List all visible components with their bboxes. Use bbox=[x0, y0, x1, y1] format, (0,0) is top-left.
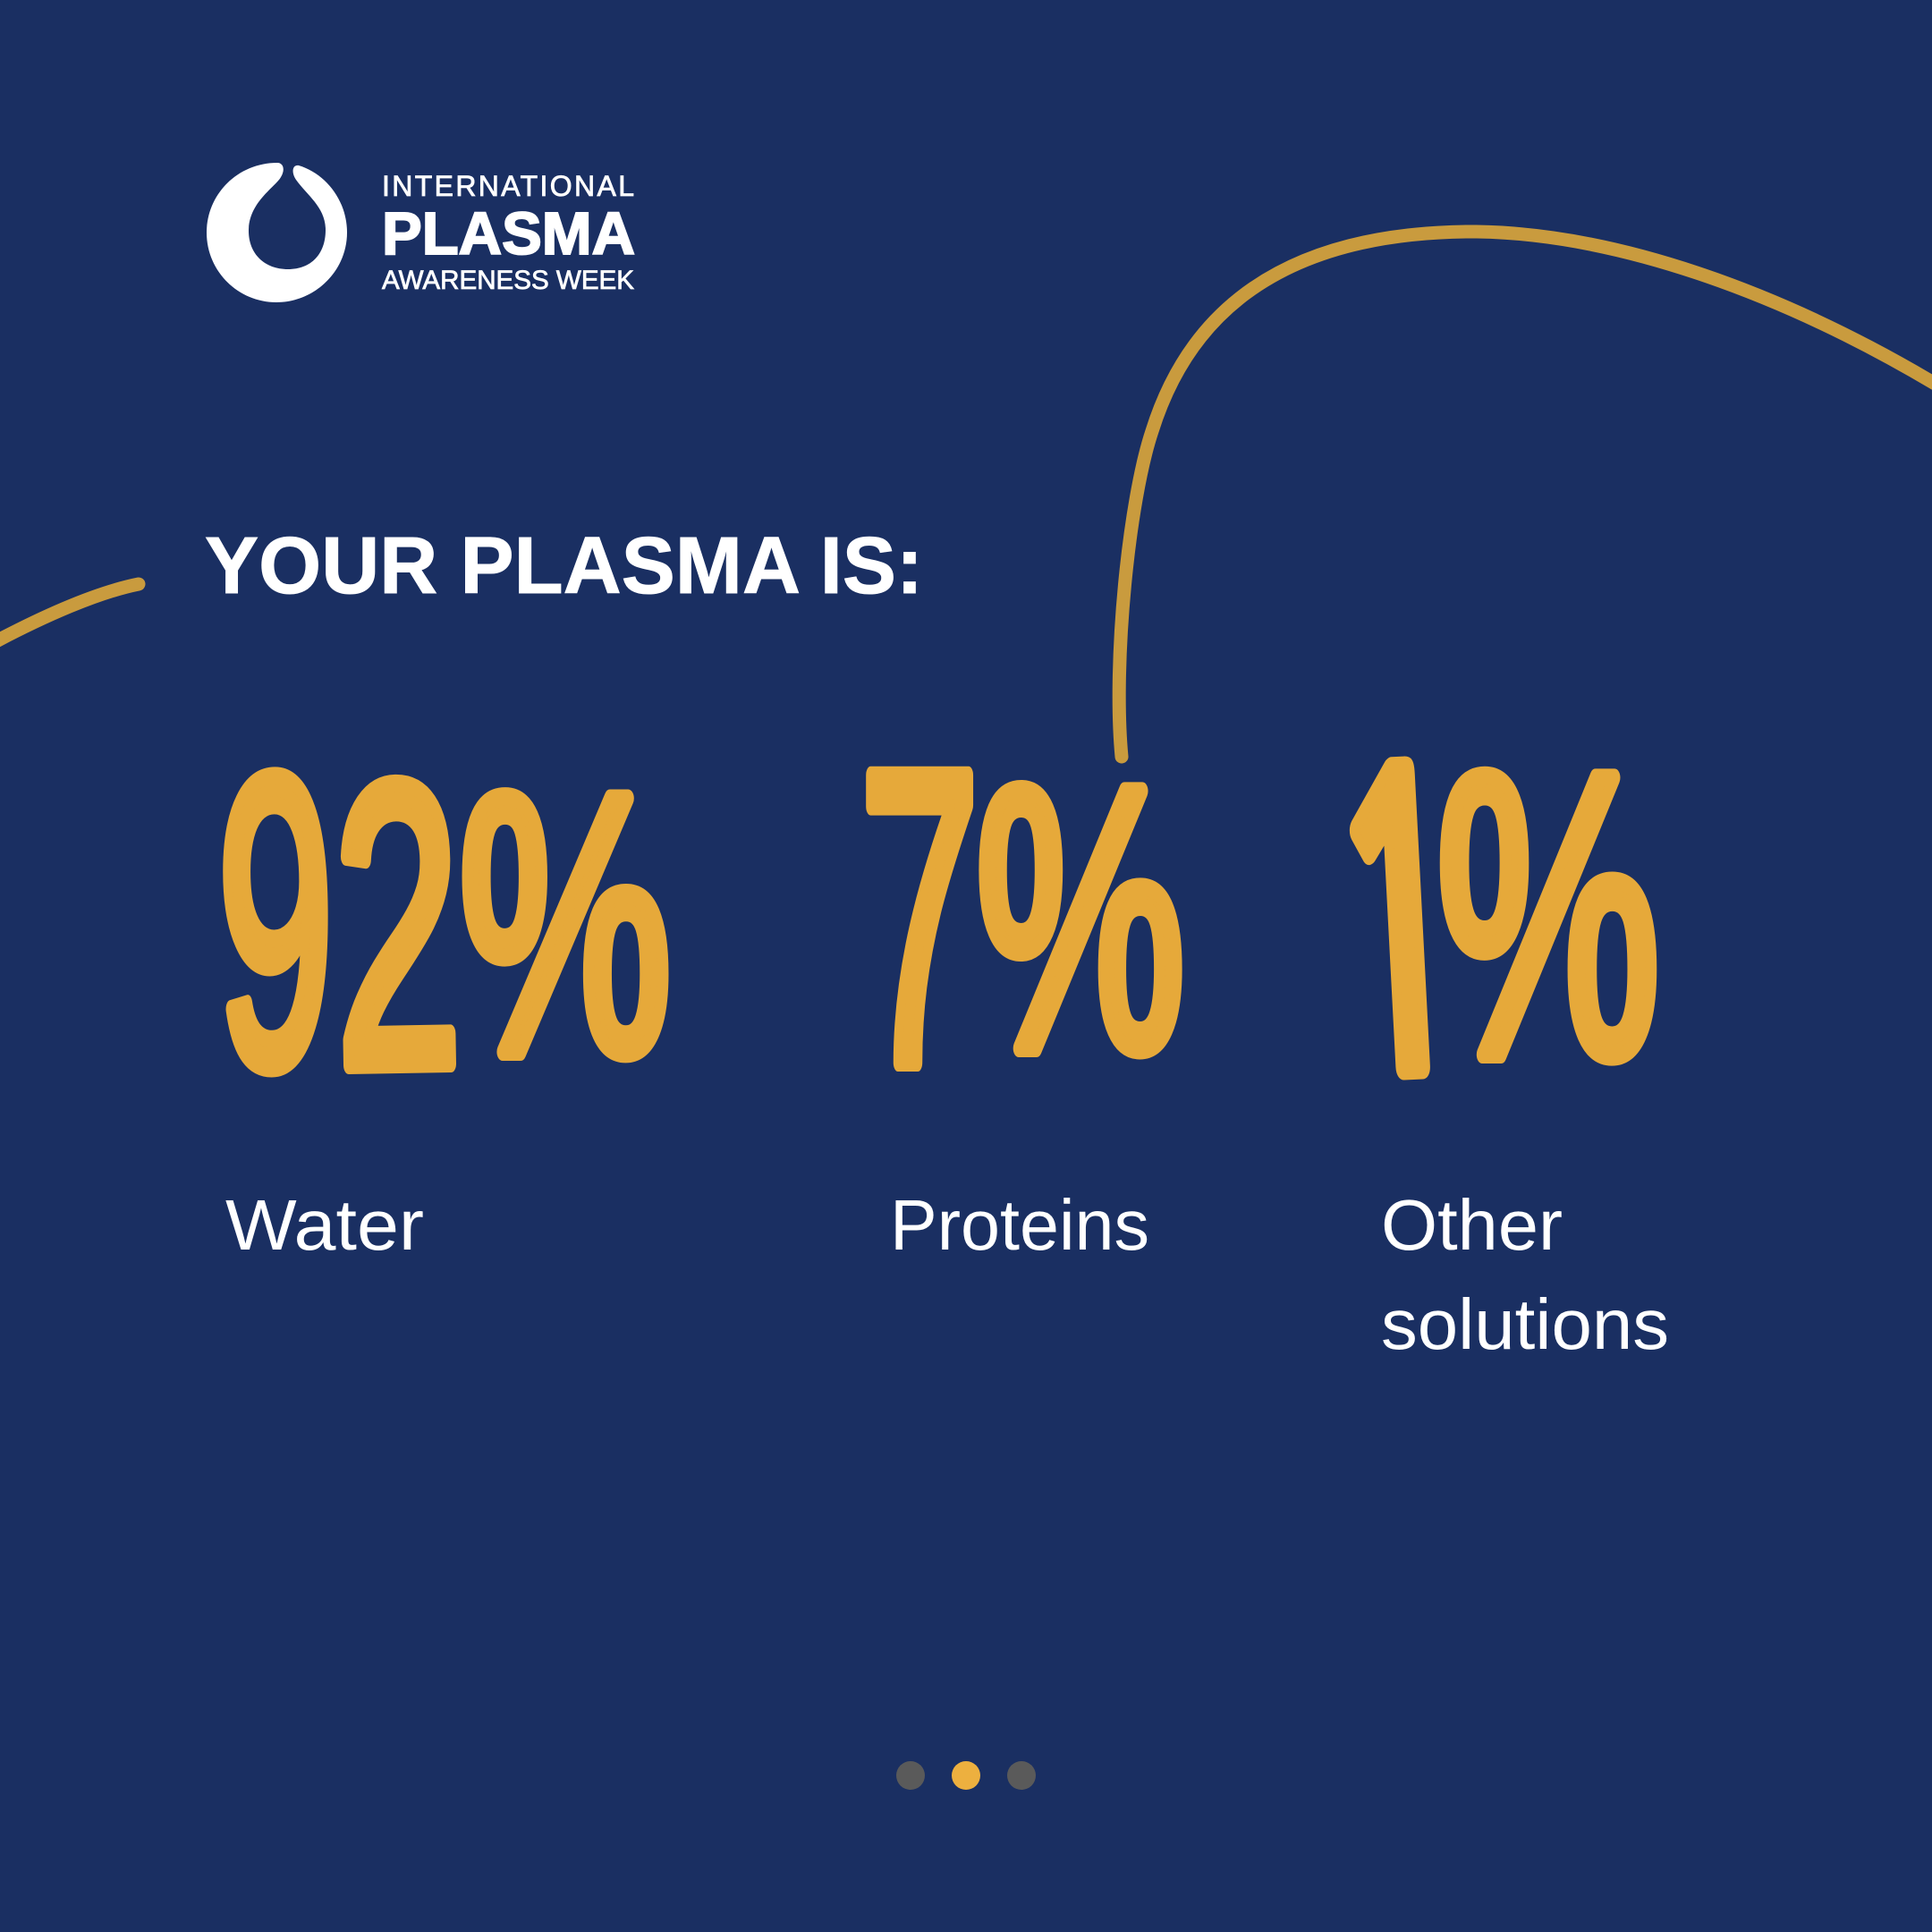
label: proteins: Proteins bbox=[890, 1185, 1149, 1265]
statistic: 7 percent: 7 bbox=[860, 685, 979, 1151]
logo bbox=[207, 163, 635, 302]
logo wordmark line 3: AWARENESS WEEK bbox=[382, 266, 634, 295]
arrow: short curved line at left bbox=[0, 584, 139, 644]
statistic: 1 percent: % bbox=[1436, 690, 1660, 1140]
statistic: 1 percent: 1 bbox=[1319, 728, 1482, 1136]
label: other solutions: solutions bbox=[1381, 1284, 1669, 1364]
statistic: 92 percent: 2 bbox=[331, 700, 464, 1151]
statistic: 7 percent: % bbox=[976, 710, 1185, 1128]
pagination dots bbox=[896, 1761, 1036, 1790]
heading: YOUR PLASMA IS: bbox=[205, 521, 923, 611]
arrow: large curved line at right bbox=[1119, 232, 1932, 757]
label: other solutions bbox=[1381, 1185, 1669, 1364]
statistic: 1 percent bbox=[1319, 690, 1660, 1140]
statistic: 92 percent bbox=[217, 691, 672, 1153]
label: water: Water bbox=[225, 1185, 424, 1265]
statistic: 92 percent: % bbox=[459, 718, 672, 1131]
label: other solutions: Other bbox=[1381, 1185, 1563, 1265]
icon: plasma drop bbox=[207, 163, 347, 302]
statistic: 92 percent: 9 bbox=[217, 691, 334, 1153]
logo wordmark line 1: INTERNATIONAL bbox=[382, 170, 634, 202]
logo wordmark line 2: PLASMA bbox=[382, 200, 635, 267]
statistic: 7 percent bbox=[860, 685, 1185, 1151]
